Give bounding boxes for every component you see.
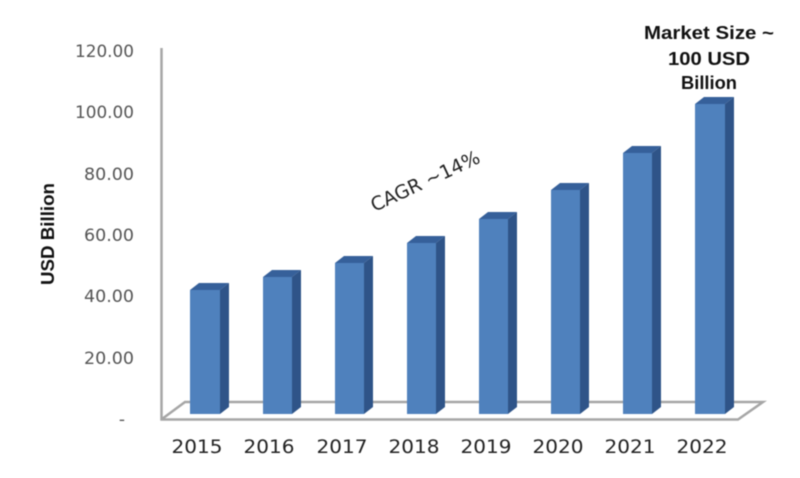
market size callout: [644, 22, 774, 93]
y-axis tick labels: 40.00: [84, 287, 134, 307]
y-axis title: USD Billion: [37, 183, 58, 285]
x-axis year labels: 2022: [676, 436, 728, 458]
bar 2017: [335, 256, 373, 414]
x-axis year labels: 2016: [244, 436, 294, 458]
bar 2018: [407, 236, 445, 414]
market size callout: Billion: [681, 72, 737, 93]
x-axis year labels: 2019: [460, 436, 512, 458]
CAGR annotation: CAGR ~14%: [367, 147, 484, 216]
bar 2021: [623, 146, 661, 414]
bar 2020: [551, 183, 589, 414]
x-axis year labels: 2020: [532, 436, 584, 458]
market size callout: 100 USD: [668, 48, 750, 69]
chart axes and floor: [162, 48, 763, 420]
y-axis tick labels: 100.00: [75, 103, 134, 123]
x-axis year labels: 2015: [172, 436, 222, 458]
x-axis year labels: [172, 436, 728, 458]
market size callout: Market Size ~: [644, 22, 774, 43]
bar 2019: [479, 212, 517, 414]
y-axis tick labels: 60.00: [84, 226, 134, 246]
x-axis year labels: 2021: [604, 436, 656, 458]
y-axis tick labels: 80.00: [84, 165, 134, 185]
x-axis year labels: 2018: [388, 436, 440, 458]
y-axis tick labels: [75, 42, 134, 430]
bar 2015: [190, 283, 229, 414]
y-axis tick labels: 120.00: [75, 42, 134, 62]
y-axis tick labels: -: [119, 410, 125, 430]
x-axis year labels: 2017: [316, 436, 368, 458]
bar 2016: [263, 270, 301, 414]
bar 2022: [695, 97, 734, 414]
y-axis tick labels: 20.00: [84, 349, 134, 369]
